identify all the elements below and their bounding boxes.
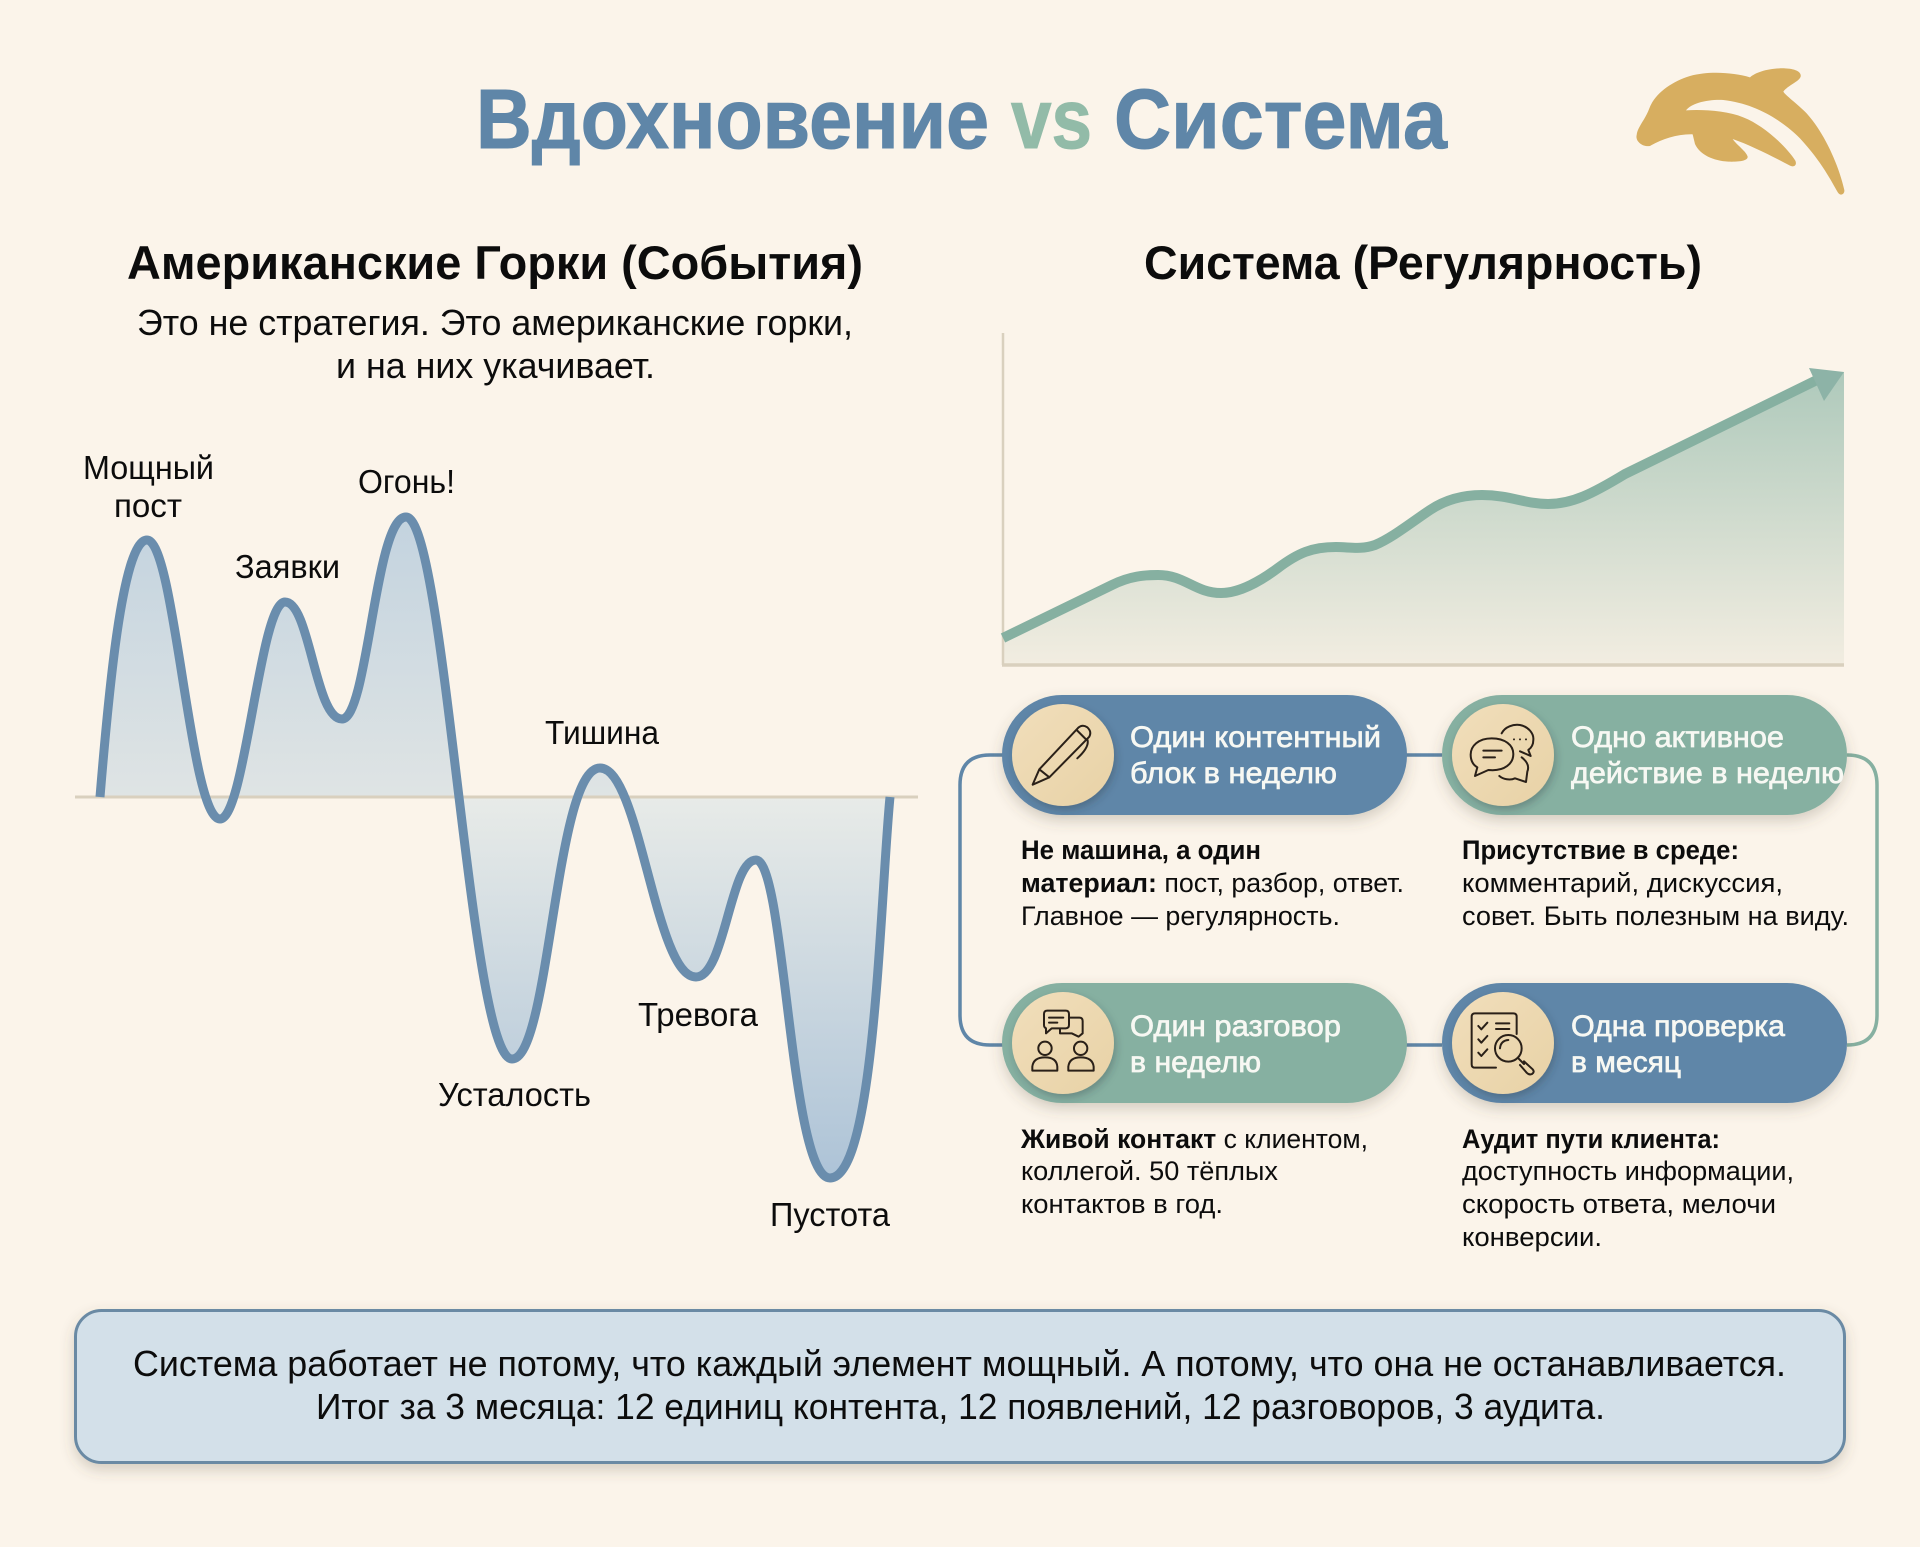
pill title: Один контентный	[1130, 721, 1381, 754]
wave chart	[75, 517, 918, 1178]
title	[476, 72, 1448, 166]
step card 2: active action	[1442, 695, 1849, 931]
icon: chat bubbles	[1452, 704, 1554, 806]
pill title: Один разговор	[1130, 1010, 1341, 1043]
label: fire: Огонь!	[358, 463, 455, 500]
description: Живой контакт с клиентом,	[1020, 1124, 1368, 1154]
pill title: Одно активное	[1571, 721, 1784, 754]
label: fatigue: Усталость	[438, 1076, 591, 1113]
title: vs	[1011, 72, 1092, 166]
heading: system: Система (Регулярность)	[1144, 236, 1702, 289]
summary line 1: Система работает не потому, что каждый элемент мощный. А потому, что она не останавливается.	[133, 1343, 1786, 1384]
pill subtitle: действие в неделю	[1571, 757, 1844, 790]
pill subtitle: в неделю	[1130, 1046, 1261, 1079]
icon: pen	[1012, 704, 1114, 806]
label: post: пост	[114, 487, 182, 524]
label: silence: Тишина	[545, 714, 660, 751]
label: powerful post: Мощный	[83, 449, 214, 486]
subtitle line 1: Это не стратегия. Это американские горки,	[137, 302, 853, 343]
heading: roller coaster: Американские Горки (События)	[127, 236, 863, 289]
description	[1462, 1124, 1794, 1252]
description: совет. Быть полезным на виду.	[1462, 901, 1849, 931]
label: emptiness: Пустота	[770, 1196, 891, 1233]
callout: summary	[76, 1310, 1844, 1462]
description: коллегой. 50 тёплых	[1021, 1156, 1278, 1186]
icon: two people talking	[1012, 992, 1114, 1094]
pill: content block	[1002, 695, 1407, 815]
step card 1: content block	[1002, 695, 1407, 931]
pill subtitle: в месяц	[1571, 1046, 1681, 1079]
description: конверсии.	[1462, 1222, 1602, 1252]
title: Вдохновение	[476, 72, 989, 166]
label: anxiety: Тревога	[638, 996, 759, 1033]
summary line 2: Итог за 3 месяца: 12 единиц контента, 12 появлений, 12 разговоров, 3 аудита.	[316, 1386, 1605, 1427]
description: Аудит пути клиента:	[1462, 1124, 1720, 1154]
icon: golden dolphin logo	[1636, 68, 1844, 195]
pill: conversation	[1002, 983, 1407, 1103]
description	[1021, 835, 1404, 931]
pill title: Одна проверка	[1571, 1010, 1785, 1043]
pill: audit	[1442, 983, 1847, 1103]
description: материал: пост, разбор, ответ.	[1021, 868, 1404, 898]
description: Главное — регулярность.	[1021, 901, 1340, 931]
description: комментарий, дискуссия,	[1462, 868, 1783, 898]
description	[1020, 1124, 1368, 1219]
subtitle line 2: и на них укачивает.	[336, 345, 655, 386]
loop connectors	[960, 755, 1877, 1045]
step card 4: audit	[1442, 983, 1847, 1252]
description	[1462, 835, 1849, 931]
title: Система	[1114, 72, 1448, 166]
icon: checklist with magnifier	[1452, 992, 1554, 1094]
panel: roller coaster	[75, 236, 918, 1233]
pill subtitle: блок в неделю	[1130, 757, 1337, 790]
description: Присутствие в среде:	[1462, 835, 1739, 865]
label: leads: Заявки	[235, 548, 340, 585]
pill: active action	[1442, 695, 1847, 815]
description: доступность информации,	[1462, 1156, 1794, 1186]
growth area chart	[1002, 333, 1844, 665]
step card 3: conversation	[1002, 983, 1407, 1219]
panel: system	[960, 236, 1877, 1252]
description: скорость ответа, мелочи	[1462, 1189, 1776, 1219]
description: Не машина, а один	[1021, 835, 1261, 865]
description: контактов в год.	[1021, 1189, 1223, 1219]
